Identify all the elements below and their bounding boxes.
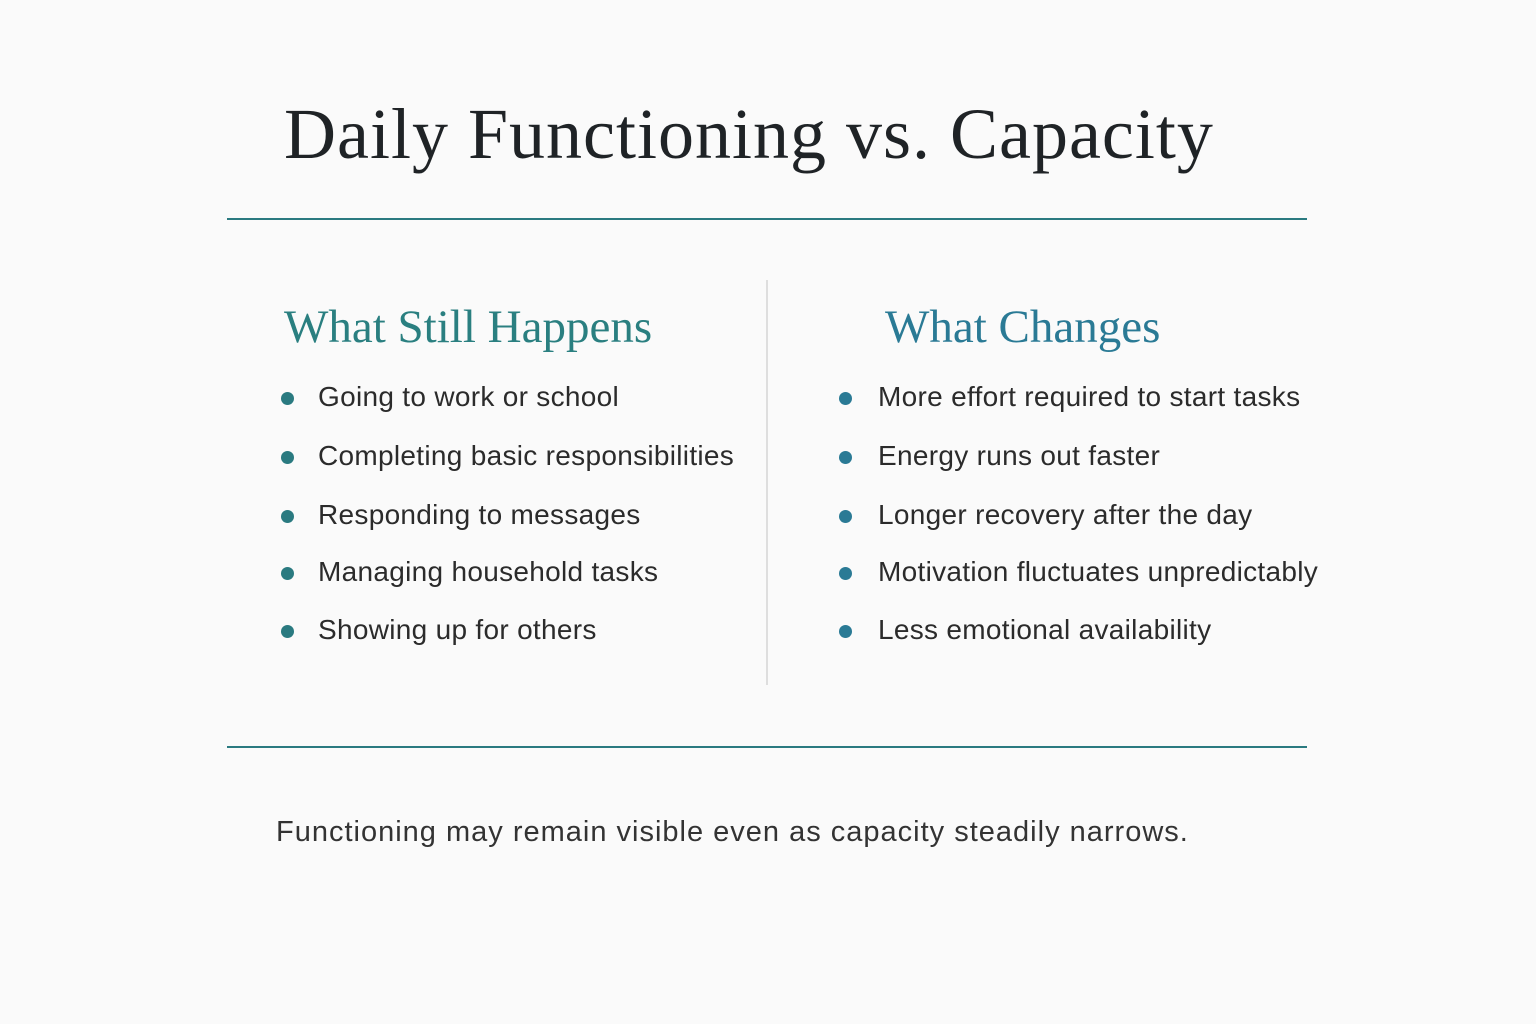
list: still happens: Going to work or school	[318, 381, 619, 412]
list: changes: Less emotional availability	[878, 614, 1211, 645]
column divider	[766, 280, 768, 685]
top rule	[227, 218, 1307, 220]
list: still happens	[281, 381, 734, 645]
list: changes: More effort required to start tasks	[878, 381, 1300, 412]
heading: what still happens: What Still Happens	[284, 301, 652, 353]
list: changes: Longer recovery after the day	[878, 499, 1252, 530]
list: still happens: Responding to messages	[318, 499, 641, 530]
title: Daily Functioning vs. Capacity	[284, 94, 1214, 174]
heading: what changes: What Changes	[885, 301, 1160, 353]
list: changes	[839, 381, 1318, 645]
panel: what changes	[839, 301, 1318, 645]
list: changes: Motivation fluctuates unpredictably	[878, 556, 1318, 587]
list: still happens: Showing up for others	[318, 614, 597, 645]
list: changes: Energy runs out faster	[878, 440, 1160, 471]
list: still happens: Completing basic responsibilities	[318, 440, 734, 471]
panel: what still happens	[281, 301, 734, 645]
list: still happens: Managing household tasks	[318, 556, 658, 587]
bottom rule	[227, 746, 1307, 748]
footer statement: Functioning may remain visible even as capacity steadily narrows.	[276, 816, 1189, 848]
